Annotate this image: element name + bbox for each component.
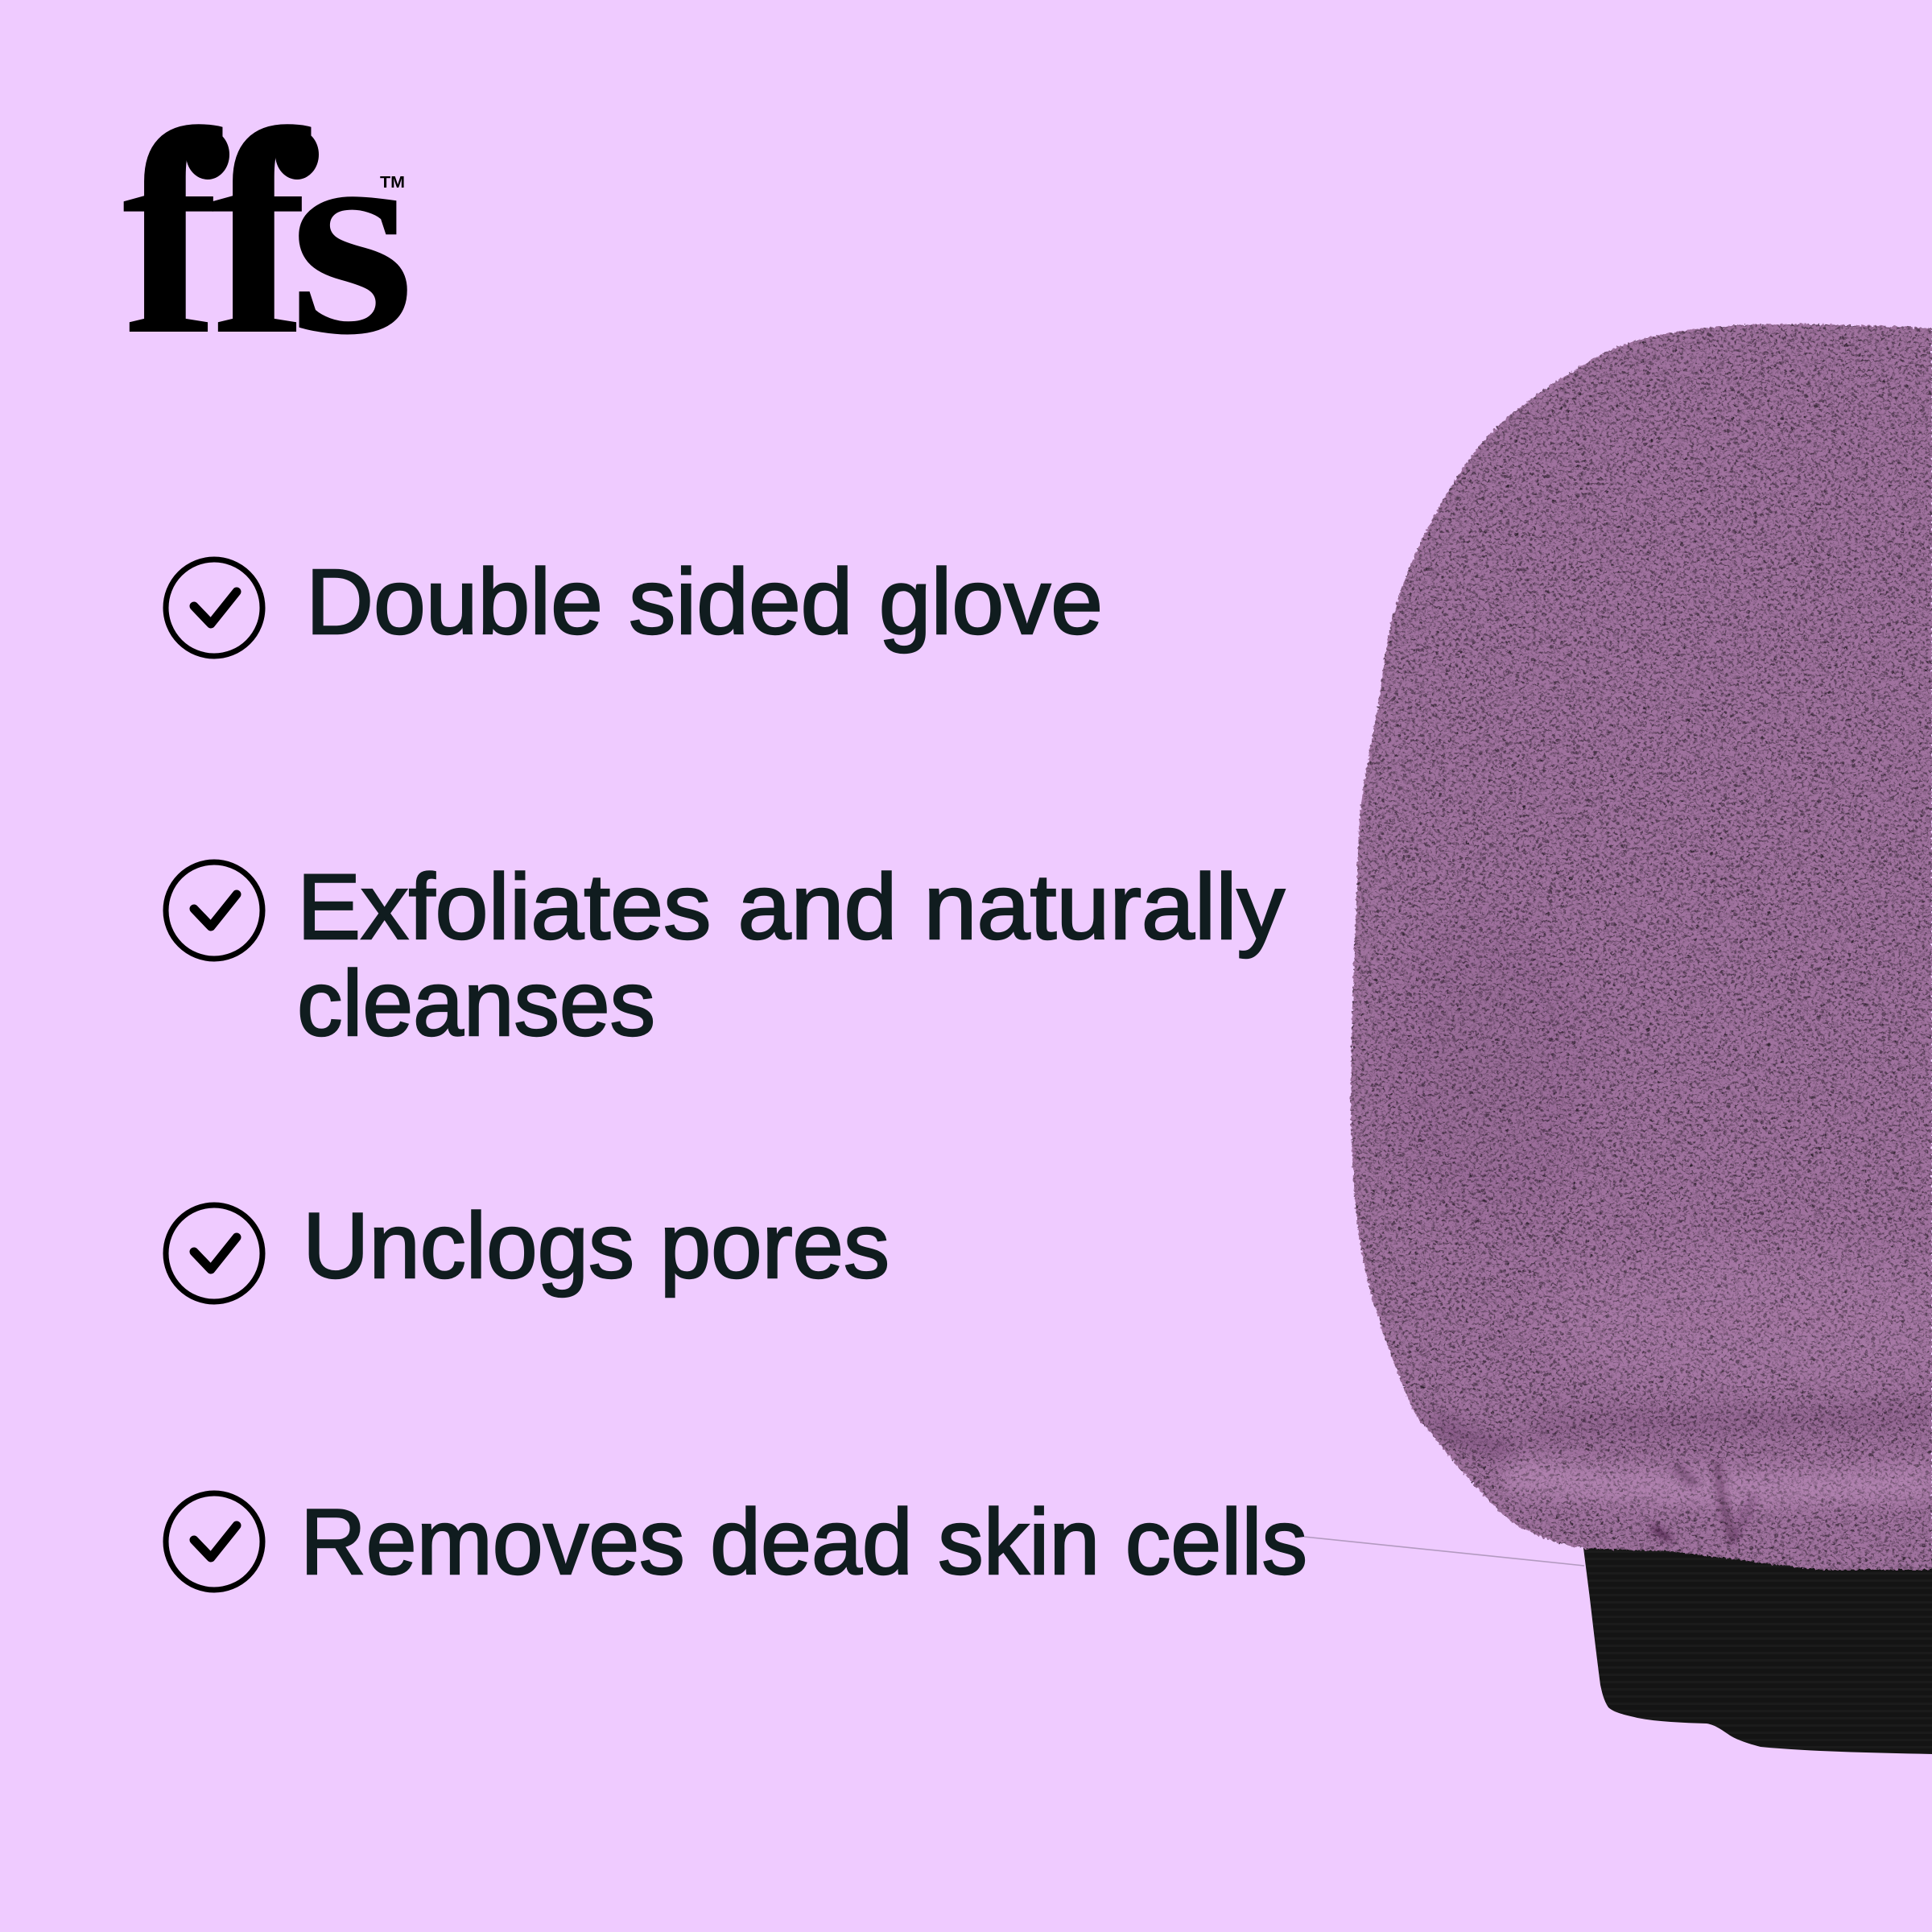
icon: check circle <box>166 559 262 656</box>
feature: exfoliates and naturally cleanses <box>166 856 1286 1055</box>
icon: check circle <box>166 1205 262 1302</box>
glove fabric <box>1336 314 1932 1578</box>
feature: removes dead skin cells <box>166 1491 1307 1594</box>
logo: ffs wordmark <box>122 70 415 396</box>
icon: check circle <box>166 862 262 959</box>
text: exfoliates and naturally cleanses: Exfoliates and naturally <box>297 856 1286 959</box>
logo: ffs wordmark: f <box>122 70 223 396</box>
text: unclogs pores: Unclogs pores <box>303 1195 890 1298</box>
logo: ffs wordmark: s <box>289 77 415 394</box>
stray thread <box>1304 1537 1584 1566</box>
text: double sided glove: Double sided glove <box>306 551 1103 654</box>
feature: unclogs pores <box>166 1195 890 1302</box>
gathered folds <box>1654 1465 1753 1539</box>
text: removes dead skin cells: Removes dead skin cells <box>300 1491 1307 1594</box>
glove elastic band <box>1583 1542 1932 1754</box>
product: exfoliating glove <box>1304 314 1932 1754</box>
icon: check circle <box>166 1493 262 1590</box>
text: exfoliates and naturally cleanses <box>297 856 1286 1055</box>
logo: ffs wordmark: f <box>210 70 312 396</box>
fabric shading <box>1393 926 1932 1488</box>
text: exfoliates and naturally cleanses: cleanses <box>297 952 655 1055</box>
feature: double sided glove <box>166 551 1103 656</box>
trademark mark: TM <box>380 174 405 192</box>
